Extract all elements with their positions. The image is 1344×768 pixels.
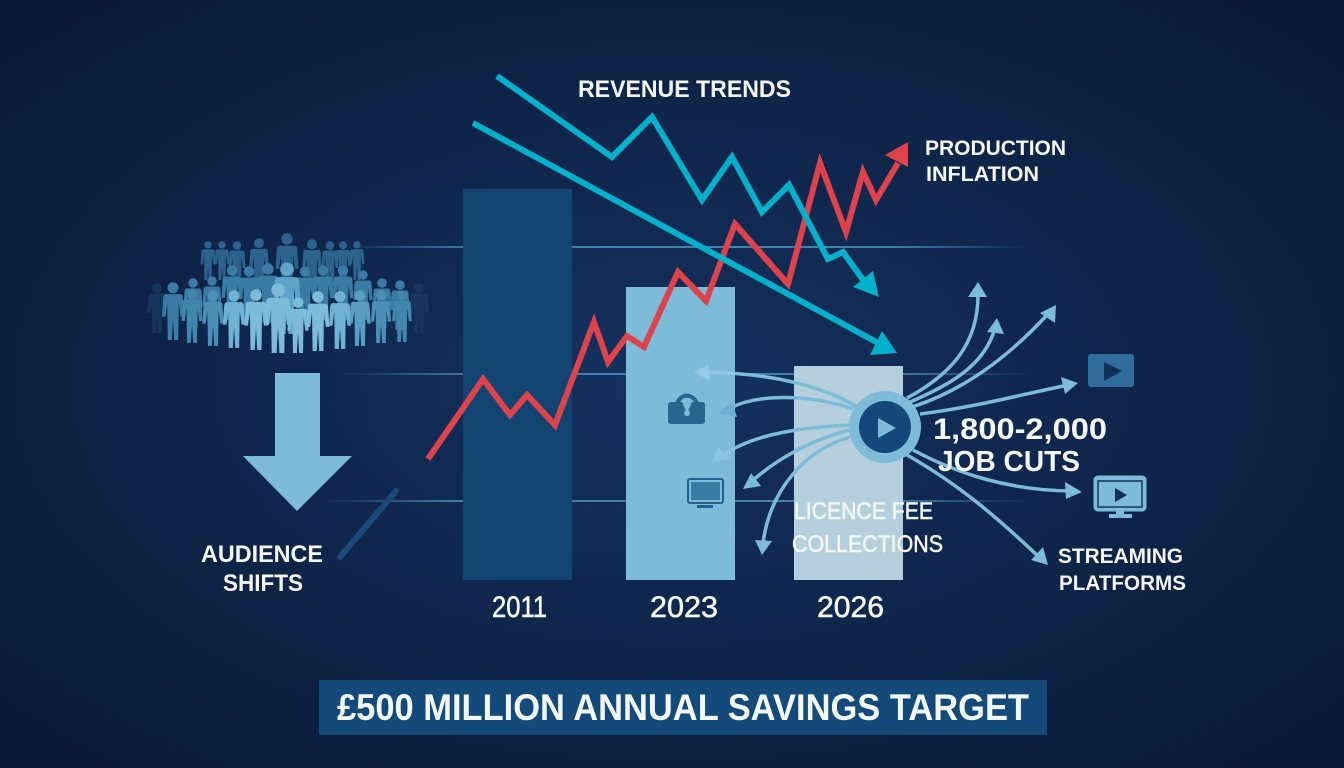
bar: 2023	[626, 287, 735, 580]
label: licence fee collections: COLLECTIONS	[792, 531, 943, 558]
label: job cuts: JOB CUTS	[938, 446, 1080, 478]
heading: revenue trends: REVENUE TRENDS	[578, 76, 791, 103]
line: revenue trend lower (cyan)	[473, 123, 897, 355]
arrow: audience decline	[243, 373, 352, 511]
bar: 2011	[463, 189, 572, 580]
icon: padlock	[668, 396, 705, 424]
label: production inflation	[925, 137, 1066, 186]
label: audience shifts: AUDIENCE	[201, 541, 323, 568]
bar chart: revenue by year	[463, 189, 903, 624]
label: production inflation: INFLATION	[926, 163, 1039, 186]
icon: central play hub	[849, 391, 921, 463]
year labels	[492, 591, 884, 624]
banner: savings target: £500 MILLION ANNUAL SAVINGS TARGET	[337, 687, 1029, 728]
label: streaming platforms: STREAMING	[1058, 545, 1183, 568]
line: production inflation (red)	[428, 142, 908, 459]
label: licence fee collections	[792, 498, 943, 558]
icon: monitor with play	[1095, 477, 1145, 518]
icon: small monitor	[688, 479, 723, 508]
icon: play box	[1088, 354, 1134, 387]
label: licence fee collections: LICENCE FEE	[794, 498, 933, 525]
label: audience shifts	[201, 541, 323, 597]
label: job cuts	[933, 413, 1107, 478]
label: streaming platforms	[1058, 545, 1186, 595]
bar: 2026	[794, 366, 903, 580]
year labels: 2026	[817, 591, 884, 624]
line: revenue trend upper (cyan)	[497, 76, 879, 297]
diagonal bar	[340, 491, 396, 557]
label: job cuts: 1,800-2,000	[933, 413, 1107, 446]
year labels: 2011	[492, 591, 547, 624]
arrows: spreading out to the right	[907, 282, 1082, 565]
year labels: 2023	[650, 591, 718, 624]
arrows: spreading out to the left	[694, 365, 857, 555]
label: streaming platforms: PLATFORMS	[1059, 572, 1186, 595]
label: audience shifts: SHIFTS	[223, 570, 303, 597]
icon: audience crowd	[148, 233, 428, 353]
label: production inflation: PRODUCTION	[925, 137, 1066, 160]
